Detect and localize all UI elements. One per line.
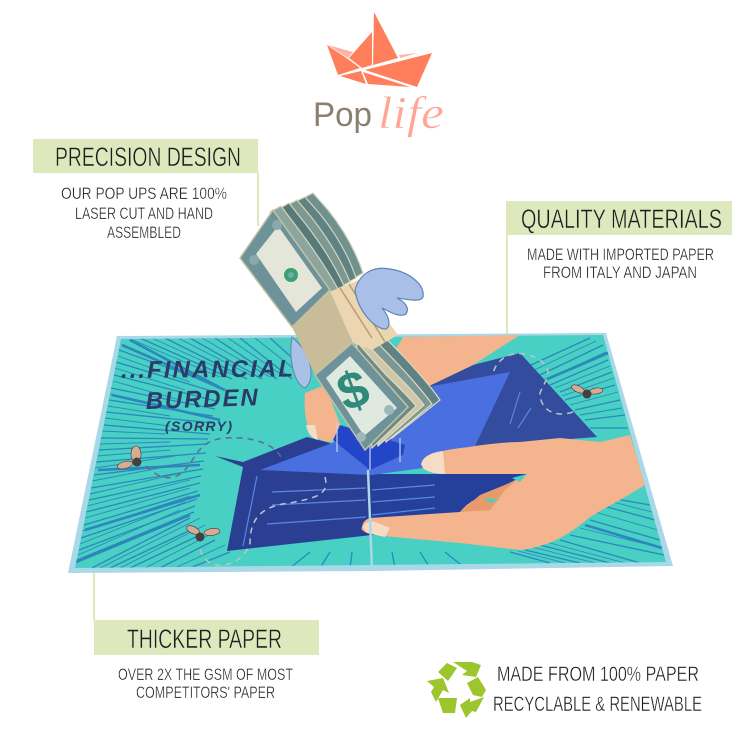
panel: quality materials bbox=[506, 201, 732, 282]
dashed flight paths bbox=[146, 354, 573, 565]
panel: thicker paper: COMPETITORS' PAPER bbox=[136, 684, 275, 702]
upper hand bbox=[395, 335, 520, 395]
pop-up card base bbox=[68, 333, 673, 573]
panel: precision design bbox=[33, 139, 258, 242]
front bill lower: $ bbox=[330, 359, 377, 423]
panel: precision design: PRECISION DESIGN bbox=[55, 142, 241, 172]
pop-up: money stack bbox=[240, 193, 440, 450]
card lettering: BURDEN bbox=[145, 384, 259, 415]
panel: precision design: ASSEMBLED bbox=[107, 224, 181, 242]
icon: front wing bbox=[355, 268, 423, 329]
text: recycling claim bbox=[493, 663, 702, 716]
panel: quality materials: FROM ITALY AND JAPAN bbox=[543, 264, 697, 282]
wallet bbox=[215, 353, 597, 551]
pop-up: blue base bbox=[333, 423, 405, 470]
logo: Poplife paper boat bbox=[313, 12, 444, 138]
front bill upper bbox=[240, 210, 330, 327]
icon: back wing bbox=[291, 337, 311, 388]
icon: flies bbox=[116, 383, 603, 542]
leader lines bbox=[94, 172, 507, 621]
left finger bbox=[305, 385, 345, 442]
icon: recycle bbox=[427, 662, 486, 718]
panel: thicker paper: OVER 2X THE GSM OF MOST bbox=[118, 666, 293, 684]
fold line bbox=[368, 470, 372, 570]
panel: thicker paper bbox=[94, 620, 319, 702]
panel: precision design: LASER CUT AND HAND bbox=[75, 205, 213, 223]
card lettering bbox=[121, 355, 293, 434]
back bills upper bbox=[270, 193, 363, 292]
logo: Poplife paper boat: Pop bbox=[313, 96, 372, 134]
logo: Poplife paper boat: life bbox=[378, 87, 444, 138]
front bill lower bbox=[315, 343, 408, 450]
panel: thicker paper: THICKER PAPER bbox=[127, 624, 282, 654]
lower hand bbox=[362, 435, 645, 550]
back bills lower bbox=[356, 327, 440, 448]
panel: precision design: OUR POP UPS ARE 100% bbox=[61, 185, 227, 203]
paper band bbox=[292, 280, 398, 375]
card lettering: ...FINANCIAL bbox=[121, 355, 293, 384]
burst lines bbox=[76, 338, 664, 568]
card lettering: (SORRY) bbox=[165, 418, 232, 434]
